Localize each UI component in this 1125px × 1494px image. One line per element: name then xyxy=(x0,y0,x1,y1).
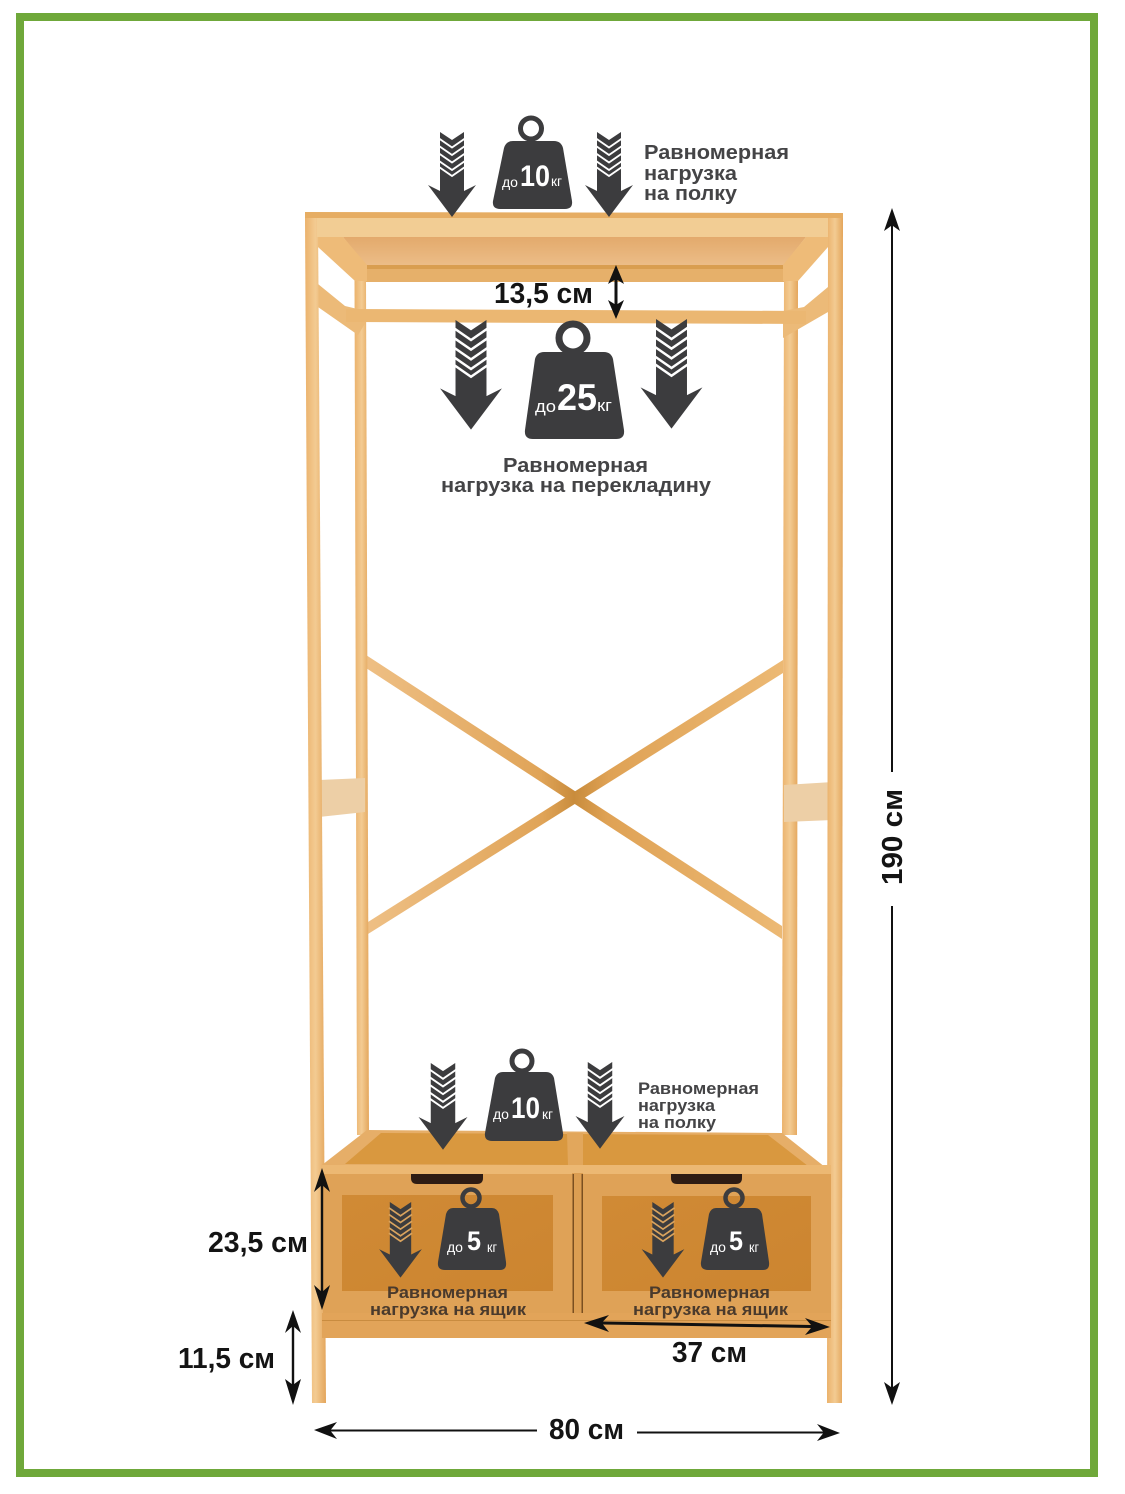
weight: 10 kg: до xyxy=(493,1106,509,1122)
text: cabinet top load: Равномерная xyxy=(638,1079,759,1098)
right drawer load xyxy=(633,1190,789,1319)
top shelf load xyxy=(428,118,789,217)
weight: 5 kg: до xyxy=(447,1239,463,1255)
weight: 5 kg: до xyxy=(710,1239,726,1255)
arrow: cabinet right xyxy=(576,1062,624,1149)
weight: 5 kg: 5 xyxy=(729,1226,743,1256)
text: left drawer load: Равномерная xyxy=(387,1283,508,1302)
top shelf underside xyxy=(343,237,806,266)
text: shelf load: Равномерная xyxy=(644,142,789,164)
weight: 25 kg xyxy=(525,324,624,439)
cabinet centre strip xyxy=(567,1133,583,1166)
weight: 5 kg: 5 xyxy=(467,1226,481,1256)
weight: 25 kg: 25 xyxy=(557,377,597,418)
dimension: 13,5 cm: 13,5 см xyxy=(494,278,593,310)
dimension: 190 cm xyxy=(877,208,909,1405)
dimension: 11,5 cm xyxy=(178,1310,301,1405)
cross braces xyxy=(366,655,783,939)
weight: 10 kg xyxy=(485,1051,563,1141)
text: shelf load xyxy=(644,142,789,205)
weight: 10 kg: кг xyxy=(551,173,562,189)
cabinet bottom rail xyxy=(322,1313,831,1338)
hanging rail xyxy=(346,309,806,324)
text: right drawer load: Равномерная xyxy=(649,1283,770,1302)
text: shelf load: нагрузка xyxy=(644,163,738,185)
weight: 5 kg: кг xyxy=(749,1239,759,1255)
cabinet front edge xyxy=(322,1165,831,1174)
top side rails xyxy=(318,237,828,281)
dimension: 80 cm: 80 см xyxy=(549,1414,624,1446)
drawer right xyxy=(582,1174,831,1313)
dimension: 190 cm: 190 см xyxy=(877,789,909,885)
text: cabinet top load: нагрузка xyxy=(638,1096,716,1115)
weight: 25 kg: кг xyxy=(597,396,612,415)
arrow: left drawer xyxy=(379,1202,422,1278)
arrow: shelf right xyxy=(585,132,633,217)
arrow: cabinet left xyxy=(419,1063,467,1150)
wardrobe rack frame xyxy=(305,212,843,1403)
arrow: rail right xyxy=(641,319,702,429)
hanging rail side brackets xyxy=(318,284,828,338)
dimension: 23,5 cm xyxy=(208,1168,330,1310)
text: rail load: нагрузка на перекладину xyxy=(441,475,712,497)
left drawer load xyxy=(370,1190,527,1319)
dimension: 37 cm: 37 см xyxy=(672,1337,747,1369)
weight: 25 kg: до xyxy=(535,397,556,416)
text: cabinet top load: на полку xyxy=(638,1113,717,1132)
text: rail load: Равномерная xyxy=(503,455,648,477)
weight: 10 kg: 10 xyxy=(520,160,550,193)
text: shelf load: на полку xyxy=(644,183,738,205)
dimension: 37 cm xyxy=(584,1315,830,1369)
drawer left xyxy=(323,1174,574,1313)
text: rail load xyxy=(441,455,712,497)
weight: 10 kg: 10 xyxy=(511,1092,540,1125)
top shelf plate xyxy=(305,212,843,218)
text: left drawer load xyxy=(370,1283,527,1319)
cabinet top surface xyxy=(345,1133,808,1166)
top shelf front rail xyxy=(317,218,828,237)
cabinet centre divider xyxy=(572,1173,583,1314)
text: right drawer load: нагрузка на ящик xyxy=(633,1300,789,1319)
outer posts xyxy=(305,218,843,1403)
cabinet top load xyxy=(419,1051,759,1150)
weight: 5 kg xyxy=(438,1190,506,1270)
weight: 5 kg xyxy=(701,1190,769,1270)
arrow: rail left xyxy=(440,320,502,430)
middle side blocks xyxy=(319,778,833,822)
dimension: 80 cm xyxy=(314,1414,840,1446)
text: right drawer load xyxy=(633,1283,789,1319)
weight: 10 kg xyxy=(493,118,572,209)
dimension: 23,5 cm: 23,5 см xyxy=(208,1227,308,1259)
inner posts xyxy=(354,280,798,1135)
arrow: right drawer xyxy=(642,1202,684,1278)
cabinet with drawers xyxy=(322,1130,831,1338)
weight: 5 kg: кг xyxy=(487,1239,497,1255)
arrow: shelf left xyxy=(428,132,476,217)
weight: 10 kg: кг xyxy=(542,1106,553,1122)
text: left drawer load: нагрузка на ящик xyxy=(370,1300,527,1319)
text: cabinet top load xyxy=(638,1079,759,1132)
dimension: 13,5 cm xyxy=(494,265,624,319)
cabinet top frame xyxy=(322,1130,830,1175)
dimension: 11,5 cm: 11,5 см xyxy=(178,1343,275,1375)
top shelf back rail xyxy=(366,265,784,282)
hanging rail load xyxy=(440,319,712,497)
weight: 10 kg: до xyxy=(502,174,518,190)
